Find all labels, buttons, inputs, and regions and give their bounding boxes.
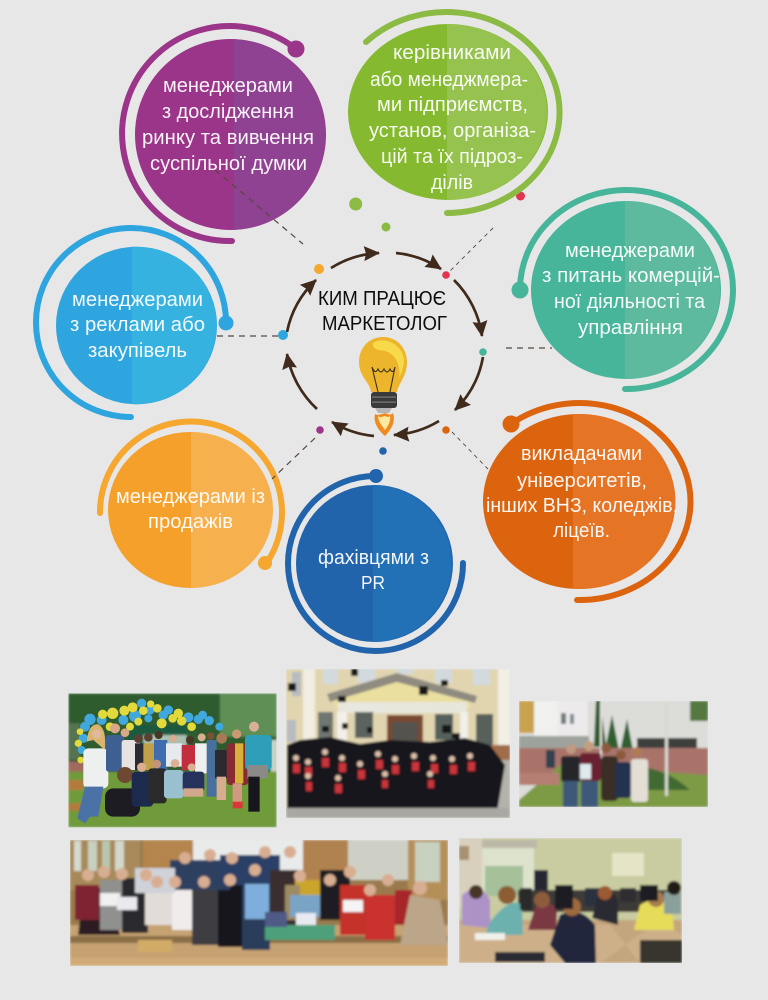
- people front row: [105, 788, 140, 817]
- circular arrows: [287, 253, 483, 436]
- panel: sky blue circle: [36, 228, 234, 417]
- title: [318, 287, 447, 335]
- panel: blue circle: фахівцями з: [318, 547, 429, 569]
- decorative dots: green and red: [349, 192, 525, 232]
- panel: sky blue circle: з реклами або: [70, 314, 205, 336]
- title: МАРКЕТОЛОГ: [322, 312, 447, 335]
- panel: teal circle: [512, 190, 733, 389]
- panel: orange circle: викладачами: [521, 443, 642, 465]
- panel: teal circle: управління: [578, 317, 683, 339]
- panel: blue circle: [288, 469, 463, 651]
- panel: green circle: [348, 12, 560, 213]
- panel: green circle: цій та їх підроз-: [381, 146, 523, 168]
- icon: light bulb with rocket flame: [359, 337, 407, 436]
- panel: purple circle: з дослідження: [162, 101, 294, 123]
- panel: green circle: установ, організа-: [369, 120, 536, 142]
- panel: sky blue circle: закупівель: [88, 340, 187, 362]
- photo: graduates in front of the building: [286, 668, 510, 818]
- people back row: [83, 748, 108, 788]
- panel: orange circle: інших ВНЗ, коледжів,: [486, 495, 678, 517]
- photo: students with posters in classroom: [70, 840, 448, 966]
- panel: teal circle: менеджерами: [565, 240, 695, 262]
- photo: group with balloon arch: [68, 693, 277, 827]
- panel: sky blue circle: менеджерами: [72, 289, 203, 311]
- panel: teal circle: ної діяльності та: [554, 291, 706, 313]
- panel: green circle: керівниками: [393, 42, 511, 64]
- title: КИМ ПРАЦЮЄ: [318, 287, 446, 310]
- dashed connectors: [215, 170, 552, 479]
- panel: purple circle: суспільної думки: [150, 153, 307, 175]
- panel: green circle: ми підприємств,: [377, 94, 528, 116]
- panel: purple circle: менеджерами: [163, 75, 293, 97]
- panel: yellow-orange circle: [100, 421, 282, 588]
- panel: orange circle: університетів,: [517, 470, 647, 492]
- panel: yellow-orange circle: менеджерами із: [116, 486, 265, 508]
- panel: purple circle: [122, 26, 326, 241]
- panel: orange circle: ліцеїв.: [553, 520, 610, 542]
- panel: yellow-orange circle: продажів: [148, 511, 233, 533]
- panel: green circle: ділів: [431, 172, 473, 194]
- ring node dots: [278, 264, 487, 455]
- panel: teal circle: з питань комерцій-: [542, 265, 720, 287]
- panel: purple circle: ринку та вивчення: [142, 127, 314, 149]
- panel: orange circle: [483, 403, 690, 600]
- panel: blue circle: PR: [361, 572, 385, 593]
- photo: students at desks in classroom: [459, 838, 682, 963]
- photo: group near the university building: [519, 701, 708, 807]
- panel: green circle: або менеджмера-: [370, 69, 528, 91]
